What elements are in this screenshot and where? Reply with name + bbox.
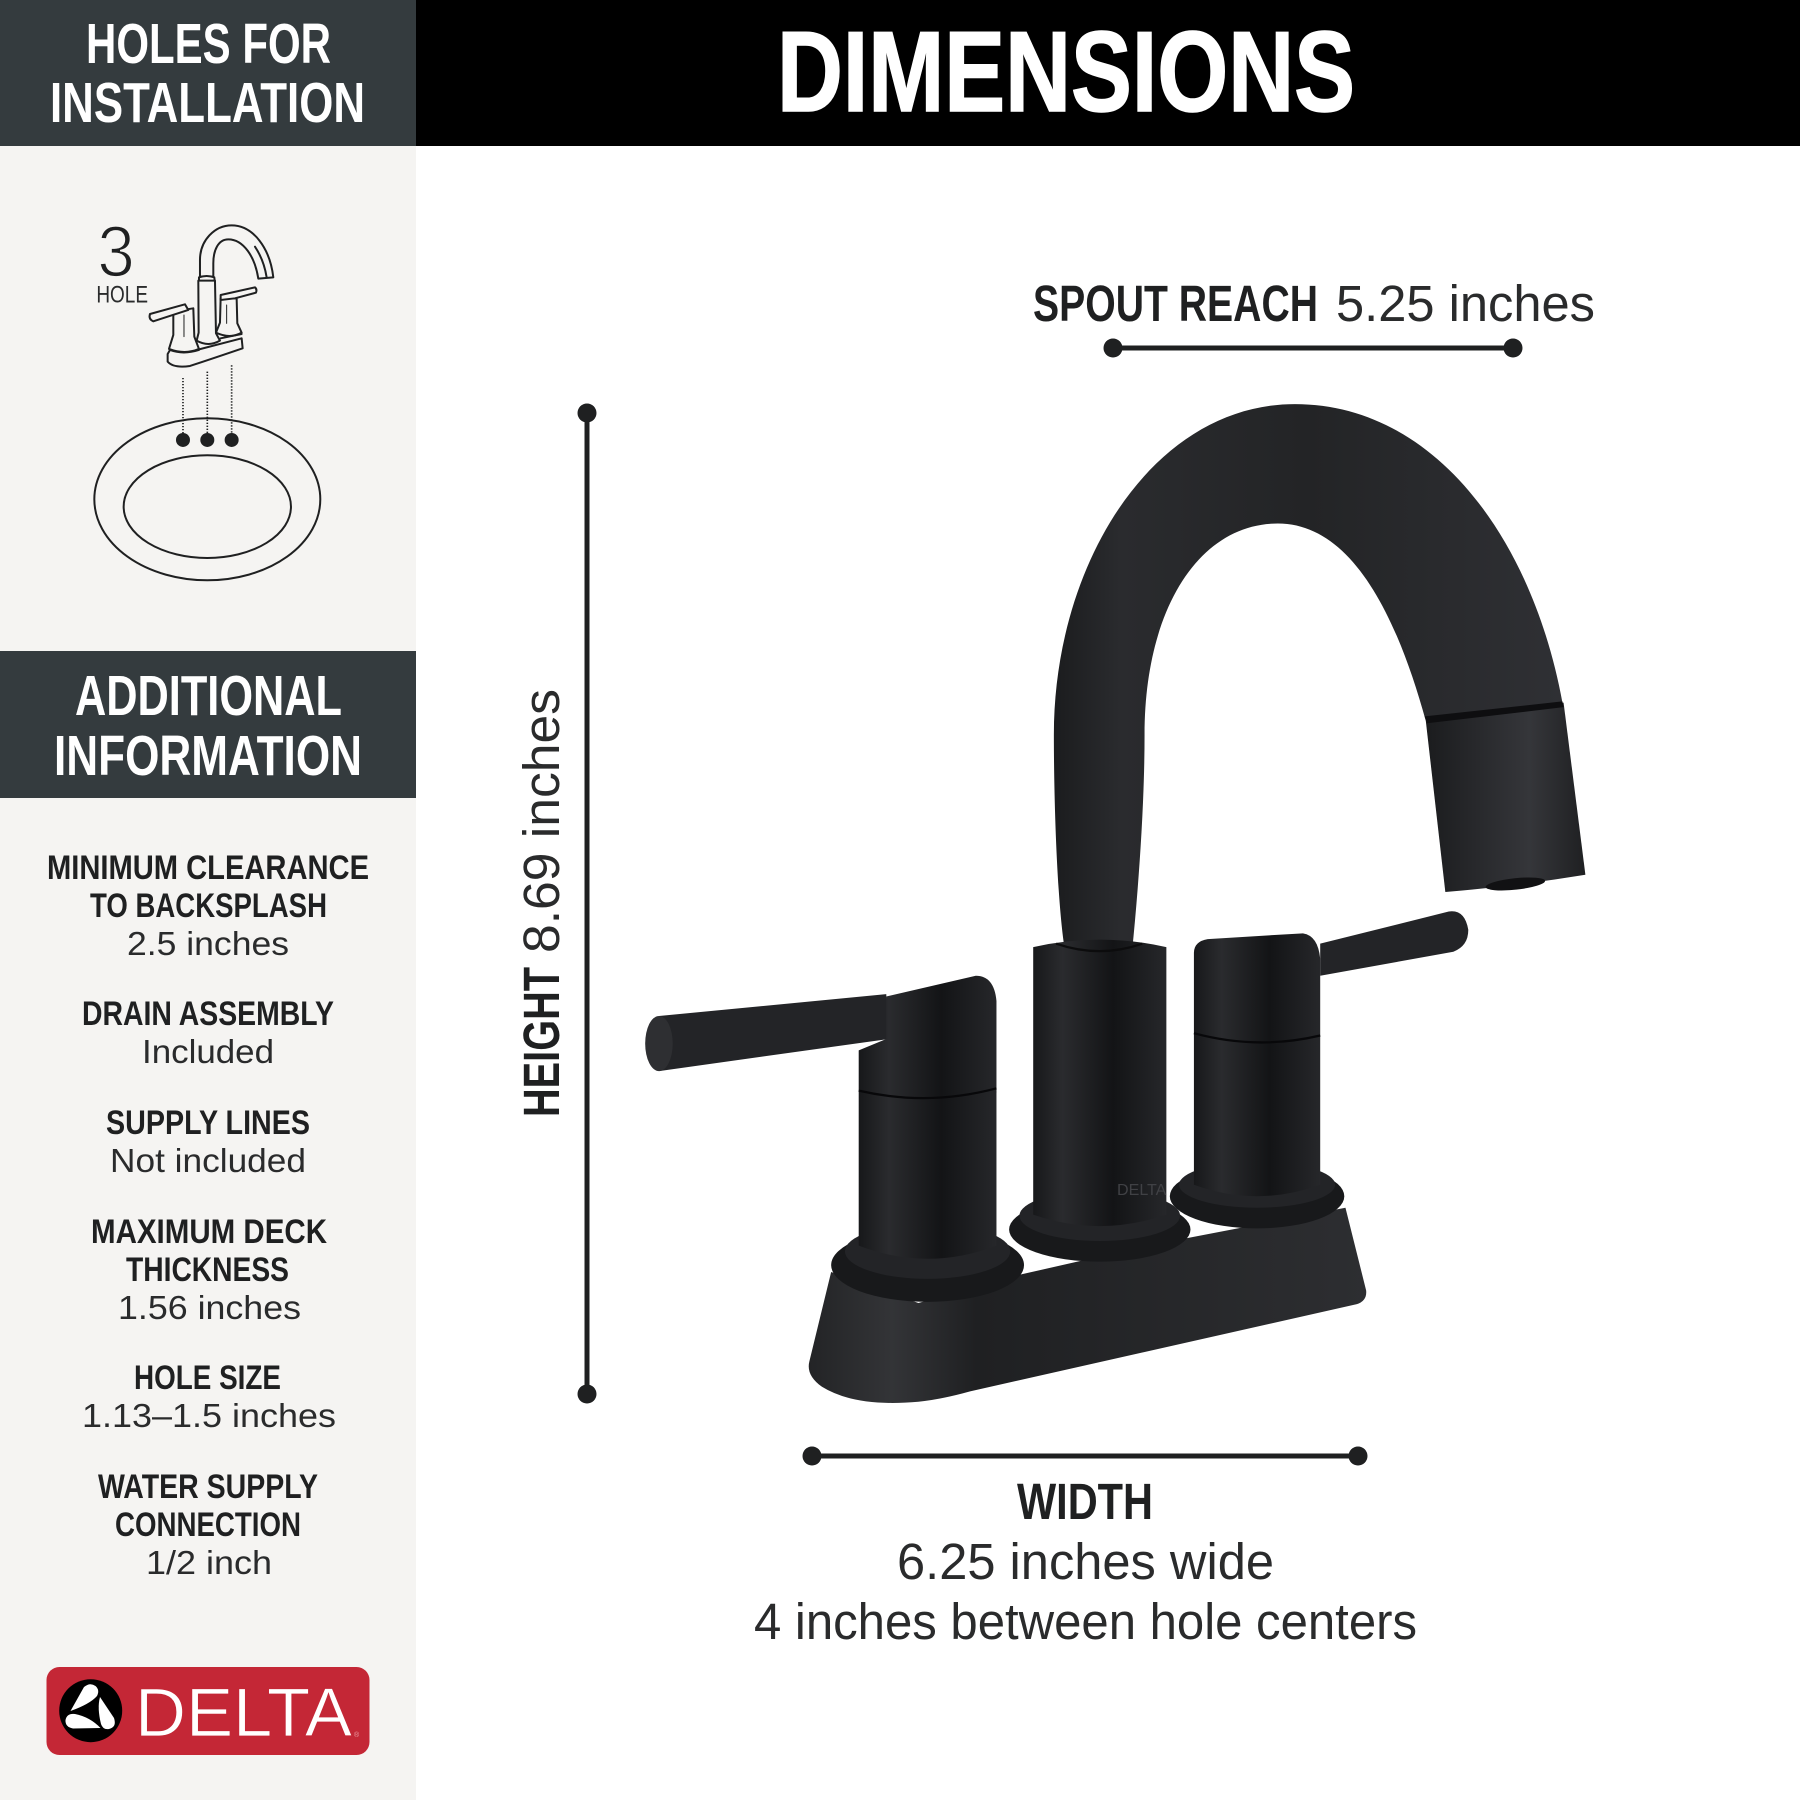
delta mark on column: DELTA: [1117, 1181, 1167, 1199]
spec: water supply connection: WATER SUPPLY: [98, 1468, 318, 1506]
title: dimensions: [416, 0, 1800, 146]
spec: hole size: HOLE SIZE: [134, 1359, 281, 1397]
dotted guide lines: [183, 365, 232, 433]
label: width: 4 inches between hole centers: [754, 1593, 1417, 1650]
spout and center column: [1009, 404, 1562, 1262]
spec: maximum deck thickness: [91, 1213, 327, 1326]
label: height: [513, 689, 570, 1117]
heading: additional information: ADDITIONAL: [75, 664, 342, 728]
heading: additional information: INFORMATION: [54, 724, 362, 788]
label: spout reach: 5.25 inches: [1336, 275, 1595, 332]
faucet line drawing: [150, 225, 273, 367]
spec: water supply connection: 1/2 inch: [146, 1544, 272, 1581]
icon: three hole faucet over sink: [94, 213, 320, 580]
heading: additional information: [0, 651, 416, 798]
label: width: [754, 1473, 1417, 1650]
spec: drain assembly: [82, 995, 334, 1070]
spec: drain assembly: DRAIN ASSEMBLY: [82, 995, 334, 1033]
deck plate: [809, 1208, 1366, 1403]
panel: left sidebar background: [0, 0, 416, 1800]
logo: delta: [46, 1667, 370, 1755]
spec: minimum clearance: 2.5 inches: [127, 925, 289, 962]
spec: supply lines: SUPPLY LINES: [106, 1104, 310, 1142]
logo: delta: ®: [354, 1731, 360, 1739]
spec: hole size: [82, 1359, 336, 1434]
spec: drain assembly: Included: [142, 1033, 274, 1070]
label: spout reach: [1033, 275, 1595, 332]
arrow: height dimension line: [578, 404, 596, 1404]
3 hole label: 3: [97, 213, 135, 293]
arrow: spout reach dimension line: [1104, 338, 1522, 358]
pull-down spray head: [1425, 701, 1585, 893]
illustration: matte black faucet: [645, 404, 1585, 1403]
spec: maximum deck thickness: THICKNESS: [126, 1251, 289, 1289]
heading: holes for installation: INSTALLATION: [50, 71, 365, 135]
spec: water supply connection: [98, 1468, 318, 1581]
spec: minimum clearance: [47, 849, 369, 962]
right handle: [1170, 911, 1468, 1228]
label: height: HEIGHT: [513, 967, 570, 1117]
3 hole label: [96, 213, 148, 308]
spec: supply lines: Not included: [110, 1142, 306, 1179]
label: spout reach: SPOUT REACH: [1033, 275, 1318, 332]
heading: holes for installation: HOLES FOR: [86, 12, 331, 76]
label: height: 8.69 inches: [513, 689, 570, 953]
spec: maximum deck thickness: MAXIMUM DECK: [91, 1213, 327, 1251]
spec: water supply connection: CONNECTION: [115, 1506, 301, 1544]
spec: hole size: 1.13–1.5 inches: [82, 1397, 336, 1434]
label: width: WIDTH: [1017, 1473, 1153, 1530]
spec: minimum clearance: MINIMUM CLEARANCE: [47, 849, 369, 887]
logo: delta: DELTA: [135, 1674, 352, 1751]
sink outline: [94, 418, 320, 580]
3 hole label: HOLE: [96, 281, 148, 308]
heading: holes for installation: [0, 0, 416, 146]
left handle: [645, 976, 1024, 1302]
three holes: [176, 433, 239, 447]
arrow: width dimension line: [802, 1446, 1368, 1466]
spec: minimum clearance: TO BACKSPLASH: [90, 887, 327, 925]
spec: maximum deck thickness: 1.56 inches: [118, 1289, 301, 1326]
spec: supply lines: [106, 1104, 310, 1179]
label: width: 6.25 inches wide: [897, 1533, 1274, 1590]
title: dimensions: DIMENSIONS: [777, 9, 1355, 136]
